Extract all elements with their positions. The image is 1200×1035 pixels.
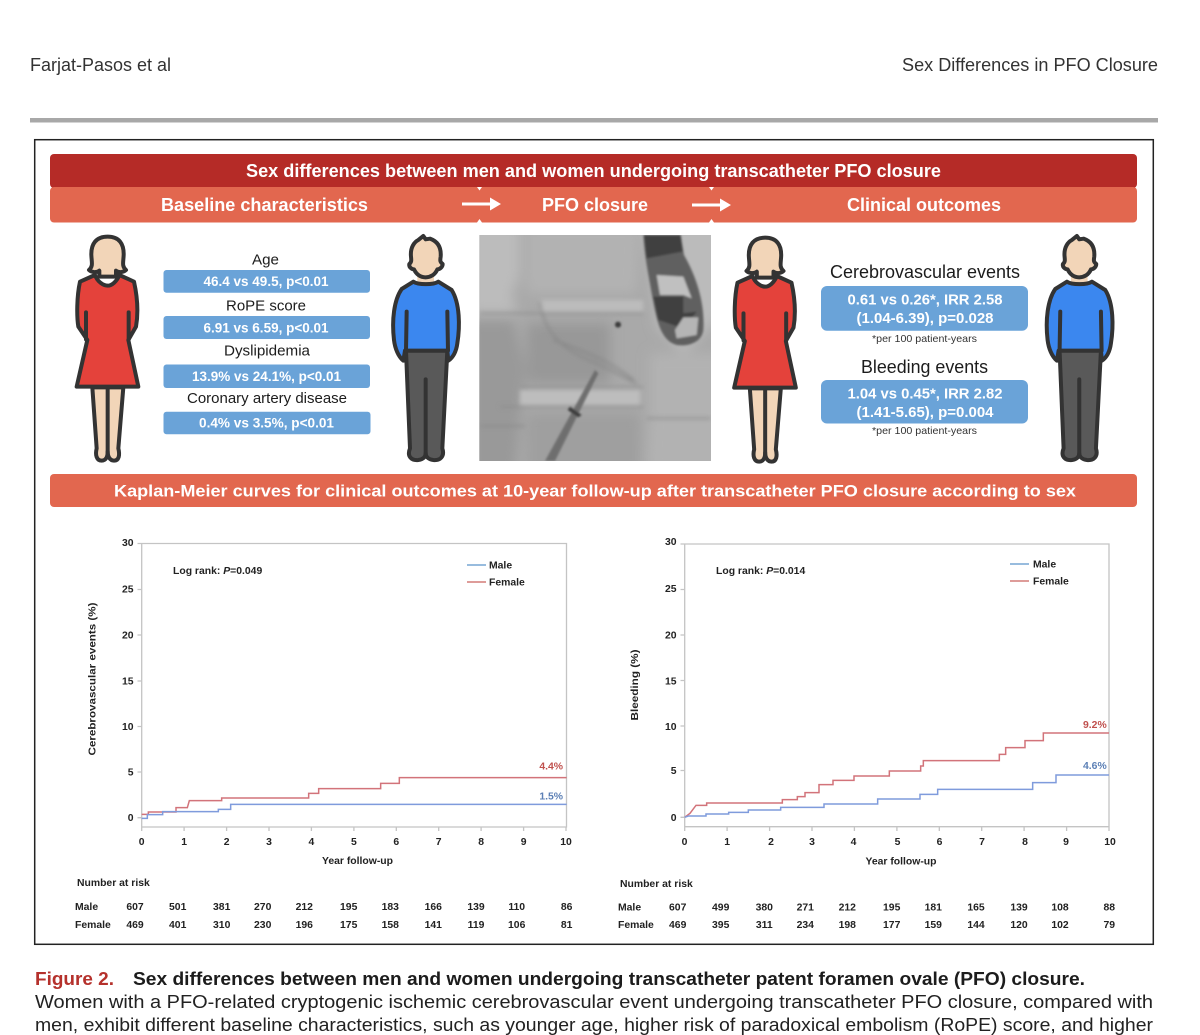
- number at risk table: 159: [925, 920, 942, 931]
- RoPE score: RoPE score: [226, 298, 306, 314]
- legend: Male: [1033, 560, 1056, 570]
- cerebrovascular events: 0.61 vs 0.26*, IRR 2.58: [848, 292, 1002, 308]
- Kaplan-Meier banner: [50, 474, 1137, 507]
- number at risk table: [75, 878, 573, 931]
- x-axis labels: 2: [224, 837, 230, 848]
- number at risk table: 144: [967, 920, 985, 931]
- plot frame and ticks: [680, 544, 1109, 831]
- running header: authors: Farjat-Pasos et al: [30, 55, 171, 75]
- x-axis labels: 2: [768, 837, 774, 848]
- number at risk table: 177: [883, 920, 901, 931]
- number at risk table: 195: [883, 902, 901, 914]
- x-axis labels: 7: [436, 837, 442, 848]
- y-axis labels: [122, 538, 134, 824]
- number at risk table: 175: [340, 920, 358, 931]
- number at risk table: 110: [508, 902, 525, 913]
- plot frame and ticks: [138, 544, 566, 831]
- y-axis labels: 0: [128, 813, 134, 824]
- log-rank annotation: Log rank: P=0.014: [716, 566, 805, 577]
- number at risk table: 395: [712, 920, 730, 931]
- number at risk table: 158: [382, 920, 399, 931]
- x-axis labels: 6: [937, 837, 943, 848]
- number at risk table: 195: [340, 902, 358, 913]
- number at risk table: 119: [468, 920, 485, 931]
- cerebrovascular events: *per 100 patient-years: [872, 333, 977, 345]
- coronary artery disease: Coronary artery disease: [187, 390, 347, 407]
- legend: [1010, 560, 1069, 588]
- curve: female: [685, 733, 1109, 817]
- age: 46.4 vs 49.5, p<0.01: [204, 274, 329, 289]
- number at risk table: 198: [839, 920, 856, 931]
- number at risk table: [618, 879, 1115, 931]
- y-axis labels: [665, 537, 677, 824]
- number at risk table: 139: [467, 902, 485, 913]
- clinical outcome results: [821, 262, 1028, 437]
- legend: Female: [489, 578, 525, 588]
- RoPE score: [164, 298, 370, 339]
- caption: body text: men, exhibit different baseline characteristics, such as younger age, higher risk of paradoxical embolism (RoPE) score, and higher: [35, 1014, 1153, 1035]
- legend: [467, 560, 525, 588]
- coronary artery disease: 0.4% vs 3.5%, p<0.01: [199, 416, 334, 430]
- label: female 10-year rate: 9.2%: [1083, 720, 1107, 731]
- baseline characteristics list: [164, 252, 370, 434]
- x-axis labels: 8: [1022, 837, 1028, 848]
- caption: body text: Women with a PFO-related cryptogenic ischemic cerebrovascular event undergoing transcatheter PFO closure, compared with: [35, 991, 1153, 1012]
- icon: woman baseline: [77, 237, 138, 461]
- number at risk table: 501: [169, 902, 187, 913]
- number at risk table: 166: [425, 902, 442, 913]
- number at risk table: 401: [169, 920, 187, 931]
- number at risk table: 469: [669, 920, 687, 931]
- caption: body text: [35, 991, 1153, 1035]
- title banner: [50, 154, 1137, 188]
- x-axis labels: 4: [851, 837, 857, 848]
- number at risk table: 88: [1104, 902, 1115, 914]
- legend: Male: [489, 560, 512, 572]
- x-axis labels: 1: [181, 837, 187, 848]
- number at risk table: 212: [839, 902, 856, 914]
- y-axis labels: 10: [665, 722, 677, 733]
- label: female 10-year rate: 4.4%: [539, 762, 563, 772]
- section banner: [50, 187, 1137, 222]
- x-axis labels: 10: [1104, 837, 1116, 848]
- x-axis labels: 10: [560, 837, 572, 848]
- bleeding events: Bleeding events: [861, 357, 988, 377]
- title banner: Sex differences between men and women undergoing transcatheter PFO closure: [246, 161, 941, 181]
- curve: male: [142, 804, 567, 818]
- dyslipidemia: [164, 342, 370, 388]
- log-rank annotation: Log rank: P=0.049: [173, 566, 262, 577]
- coronary artery disease: [164, 390, 370, 434]
- caption: figure title: Sex differences between men and women undergoing transcatheter patent foramen ovale (PFO) closure.: [133, 968, 1085, 989]
- x-axis labels: 3: [266, 837, 272, 848]
- x-axis labels: 5: [895, 837, 901, 848]
- number at risk table: 183: [382, 902, 399, 913]
- x-axis labels: [682, 837, 1116, 848]
- bleeding events: 1.04 vs 0.45*, IRR 2.82: [848, 386, 1002, 402]
- number at risk table: Female: [618, 920, 654, 931]
- number at risk table: 120: [1010, 920, 1028, 931]
- dyslipidemia: Dyslipidemia: [224, 342, 311, 360]
- y-axis labels: 30: [665, 537, 677, 548]
- number at risk table: 271: [797, 902, 814, 914]
- number at risk table: 311: [756, 920, 773, 931]
- bleeding events: *per 100 patient-years: [872, 425, 977, 437]
- y-axis labels: 0: [671, 813, 677, 824]
- arrow to PFO closure: [462, 198, 501, 210]
- number at risk table: 499: [712, 902, 730, 914]
- x-axis labels: 4: [309, 837, 315, 848]
- number at risk table: Male: [75, 902, 98, 913]
- y-axis title: Bleeding (%): [630, 650, 641, 720]
- x-axis labels: 6: [393, 837, 399, 848]
- y-axis labels: 25: [122, 584, 134, 596]
- y-axis labels: 5: [671, 766, 677, 777]
- x-axis labels: 1: [724, 837, 730, 848]
- y-axis labels: 5: [128, 768, 134, 778]
- number at risk table: 102: [1051, 920, 1069, 931]
- y-axis title: Cerebrovascular events (%): [88, 602, 98, 756]
- curve: female: [142, 778, 567, 814]
- section heading: PFO closure: PFO closure: [542, 194, 648, 215]
- icon: woman outcomes: [734, 238, 796, 462]
- number at risk table: 165: [967, 902, 985, 914]
- number at risk table: 469: [126, 920, 144, 931]
- x-axis labels: 5: [351, 837, 357, 848]
- icon: man baseline: [393, 236, 459, 460]
- number at risk table: 234: [797, 920, 814, 931]
- x-axis labels: 8: [478, 837, 484, 848]
- bleeding events: (1.41-5.65), p=0.004: [856, 404, 994, 421]
- number at risk table: 139: [1010, 902, 1028, 914]
- y-axis labels: 25: [665, 584, 677, 595]
- label: male 10-year rate: 1.5%: [539, 792, 563, 802]
- x-axis title: Year follow-up: [322, 856, 393, 867]
- legend: Female: [1033, 576, 1069, 588]
- number at risk table: 108: [1051, 902, 1069, 914]
- number at risk table: Number at risk: [620, 879, 693, 890]
- x-axis labels: 0: [682, 837, 688, 848]
- number at risk table: 270: [254, 902, 272, 913]
- figure panel: [35, 140, 1153, 944]
- fluoroscopy image of PFO closure device: [479, 235, 711, 461]
- number at risk table: Female: [75, 920, 111, 931]
- x-axis labels: 9: [521, 837, 527, 848]
- number at risk table: Number at risk: [77, 878, 150, 889]
- y-axis labels: 20: [665, 630, 677, 642]
- x-axis labels: 9: [1063, 837, 1069, 848]
- section heading: baseline characteristics: Baseline characteristics: [161, 194, 368, 215]
- number at risk table: 106: [508, 920, 526, 931]
- x-axis title: Year follow-up: [865, 856, 937, 868]
- running header: article title: Sex Differences in PFO Closure: [902, 55, 1158, 75]
- chart: bleeding Kaplan-Meier: [618, 537, 1116, 931]
- number at risk table: 230: [254, 920, 272, 931]
- number at risk table: 607: [669, 902, 687, 914]
- number at risk table: 86: [561, 902, 573, 913]
- number at risk table: 212: [296, 902, 313, 913]
- y-axis labels: 20: [122, 630, 134, 642]
- x-axis labels: [139, 837, 572, 848]
- x-axis labels: 0: [139, 837, 145, 848]
- number at risk table: 81: [561, 920, 573, 931]
- number at risk table: 196: [296, 920, 313, 931]
- bleeding events: [821, 357, 1028, 437]
- RoPE score: 6.91 vs 6.59, p<0.01: [204, 320, 329, 336]
- Kaplan-Meier banner: Kaplan-Meier curves for clinical outcomes at 10-year follow-up after transcatheter PFO closure according to sex: [114, 482, 1077, 500]
- cerebrovascular events: [821, 262, 1028, 345]
- chart: cerebrovascular events Kaplan-Meier: [75, 538, 573, 931]
- y-axis labels: 15: [665, 676, 677, 688]
- curve: male: [685, 775, 1109, 817]
- icon: man outcomes: [1047, 236, 1113, 460]
- number at risk table: 310: [213, 920, 231, 931]
- section heading: clinical outcomes: Clinical outcomes: [847, 194, 1001, 215]
- label: male 10-year rate: 4.6%: [1083, 761, 1107, 772]
- cerebrovascular events: (1.04-6.39), p=0.028: [856, 310, 994, 327]
- number at risk table: 380: [756, 902, 773, 914]
- number at risk table: Male: [618, 902, 641, 914]
- y-axis labels: 30: [122, 538, 134, 549]
- number at risk table: 381: [213, 902, 231, 913]
- age: Age: [252, 252, 279, 268]
- arrow to clinical outcomes: [692, 198, 731, 212]
- x-axis labels: 3: [809, 837, 815, 848]
- number at risk table: 79: [1104, 920, 1115, 931]
- x-axis labels: 7: [979, 837, 985, 848]
- caption: figure number: Figure 2.: [35, 968, 114, 989]
- number at risk table: 181: [925, 902, 942, 914]
- number at risk table: 141: [425, 920, 442, 931]
- y-axis labels: 10: [122, 722, 134, 733]
- number at risk table: 607: [126, 902, 144, 913]
- cerebrovascular events: Cerebrovascular events: [830, 262, 1020, 282]
- y-axis labels: 15: [122, 676, 134, 688]
- dyslipidemia: 13.9% vs 24.1%, p<0.01: [192, 369, 341, 384]
- age: [164, 252, 370, 293]
